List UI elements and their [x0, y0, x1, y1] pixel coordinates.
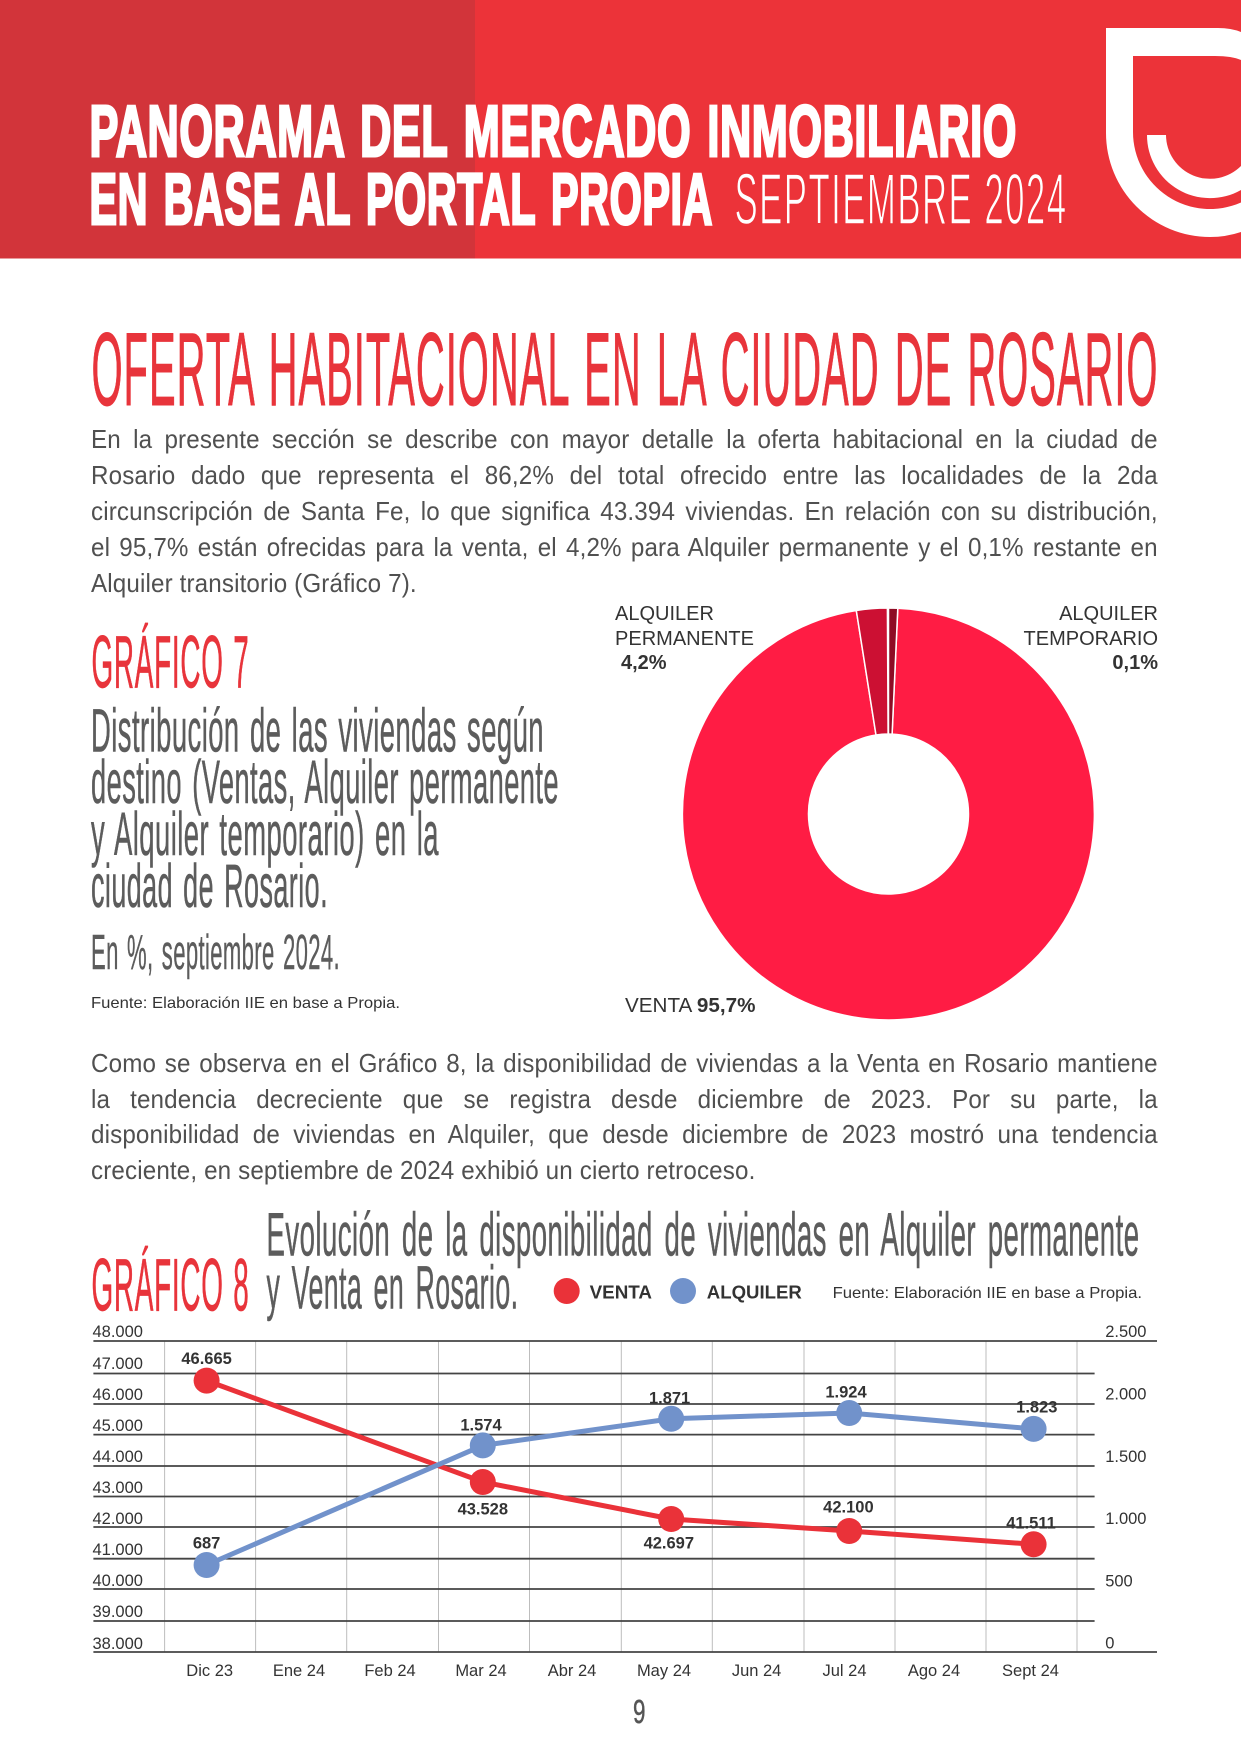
right axis: 2.500 — [1105, 1323, 1146, 1341]
data labels: 687 — [193, 1534, 220, 1552]
second paragraph: disponibilidad de viviendas en Alquiler, que desde diciembre de 2023 mostró una tendencia — [90, 1119, 1157, 1149]
icon: logo — [1106, 28, 1241, 237]
series: venta — [194, 1368, 1047, 1557]
second paragraph: Como se observa en el Gráfico 8, la disponibilidad de viviendas a la Venta en Rosario mantiene — [90, 1048, 1157, 1078]
graphic 8 description — [266, 1200, 1140, 1322]
left axis: 40.000 — [92, 1572, 143, 1590]
graphic 7 description — [91, 696, 559, 920]
x axis: Ago 24 — [908, 1662, 960, 1680]
x axis: Abr 24 — [548, 1662, 596, 1680]
legend: VENTA — [590, 1282, 652, 1302]
left axis — [92, 1323, 143, 1653]
label: alquiler permanente: ALQUILER — [615, 603, 714, 625]
intro paragraph: Rosario dado que representa el 86,2% del total ofrecido entre las localidades de la 2da — [90, 460, 1157, 490]
intro paragraph — [90, 424, 1158, 598]
header title: EN BASE AL PORTAL PROPIA — [90, 160, 713, 240]
label: alquiler permanente — [615, 603, 754, 674]
right axis: 0 — [1105, 1634, 1114, 1652]
donut labels — [615, 603, 1158, 1017]
second paragraph: la tendencia decreciente que se registra desde diciembre de 2023. Por su parte, la — [90, 1084, 1157, 1114]
right axis: 1.500 — [1105, 1448, 1146, 1466]
legend — [554, 1278, 802, 1304]
right axis: 1.000 — [1105, 1510, 1146, 1528]
header banner — [0, 0, 1241, 258]
graphic 7 title block — [91, 620, 559, 1012]
data labels: 1.574 — [460, 1416, 502, 1434]
data labels: 1.871 — [649, 1390, 690, 1408]
label: alquiler temporario — [1024, 603, 1158, 674]
page number: 9 — [633, 1693, 646, 1730]
graphic 8 title block — [92, 1200, 1140, 1326]
intro paragraph: En la presente sección se describe con mayor detalle la oferta habitacional en la ciudad de — [90, 424, 1157, 454]
right axis: 500 — [1105, 1572, 1133, 1590]
graphic 7 title block: GRÁFICO 7 — [92, 620, 250, 704]
slice: alquiler permanente — [856, 608, 888, 735]
x axis — [186, 1662, 1059, 1680]
label: alquiler permanente: PERMANENTE — [615, 628, 754, 650]
x axis: Jun 24 — [732, 1662, 781, 1680]
data labels — [181, 1350, 1057, 1552]
left axis: 45.000 — [92, 1417, 143, 1435]
left axis: 47.000 — [92, 1355, 143, 1373]
x axis: Dic 23 — [186, 1662, 233, 1680]
left axis: 38.000 — [92, 1635, 143, 1653]
legend: ALQUILER — [707, 1282, 802, 1302]
x axis: Ene 24 — [273, 1662, 325, 1680]
second paragraph: creciente, en septiembre de 2024 exhibió un cierto retroceso. — [90, 1154, 755, 1184]
label: alquiler temporario: ALQUILER — [1059, 603, 1158, 625]
x axis: Sept 24 — [1002, 1662, 1059, 1680]
data labels: 1.823 — [1016, 1398, 1057, 1416]
graphic 8 description: y Venta en Rosario. — [266, 1254, 518, 1322]
graphic 8 source: Fuente: Elaboración IIE en base a Propia. — [833, 1285, 1142, 1302]
line chart — [92, 1323, 1157, 1680]
data labels: 42.100 — [823, 1498, 874, 1516]
donut chart — [682, 608, 1094, 1020]
second paragraph — [90, 1048, 1158, 1184]
left axis: 42.000 — [92, 1510, 143, 1528]
text: Distribución de las viviendas según — [91, 696, 544, 764]
right axis — [1105, 1323, 1146, 1652]
x axis: Mar 24 — [455, 1662, 507, 1680]
graphic 7 description: y Alquiler temporario) en la — [91, 800, 439, 868]
label: alquiler temporario: TEMPORARIO — [1024, 628, 1158, 650]
x axis: May 24 — [637, 1662, 691, 1680]
left axis: 48.000 — [92, 1323, 143, 1341]
label: alquiler permanente: 4,2% — [621, 652, 667, 674]
data labels: 46.665 — [181, 1350, 232, 1368]
intro paragraph: circunscripción de Santa Fe, lo que significa 43.394 viviendas. En relación con su distribución, — [90, 496, 1157, 526]
series: alquiler — [194, 1400, 1047, 1578]
right axis: 2.000 — [1105, 1386, 1146, 1404]
left axis: 46.000 — [92, 1386, 143, 1404]
graphic 8 title block: GRÁFICO 8 — [92, 1244, 250, 1326]
data labels: 43.528 — [458, 1501, 508, 1519]
intro paragraph: Alquiler transitorio (Gráfico 7). — [90, 568, 416, 598]
data labels: 41.511 — [1006, 1514, 1056, 1532]
graphic 7 description: ciudad de Rosario. — [91, 852, 328, 920]
slice: alquiler temporario — [888, 608, 898, 734]
label: venta: VENTA 95,7% — [625, 995, 756, 1017]
left axis: 44.000 — [92, 1448, 143, 1466]
intro paragraph: el 95,7% están ofrecidas para la venta, el 4,2% para Alquiler permanente y el 0,1% restante en — [90, 532, 1157, 562]
left axis: 39.000 — [92, 1603, 143, 1621]
x axis: Jul 24 — [822, 1662, 867, 1680]
graphic 7 title block: En %, septiembre 2024. — [91, 926, 340, 980]
left axis: 41.000 — [92, 1541, 143, 1559]
text: destino (Ventas, Alquiler permanente — [91, 748, 559, 816]
x axis: Feb 24 — [364, 1662, 416, 1680]
left axis: 43.000 — [92, 1479, 143, 1497]
slice: venta — [682, 608, 1094, 1020]
data labels: 42.697 — [644, 1534, 694, 1552]
header title — [90, 92, 1068, 240]
data labels: 1.924 — [825, 1383, 867, 1401]
graphic 7 source: Fuente: Elaboración IIE en base a Propia. — [91, 995, 400, 1012]
label: alquiler temporario: 0,1% — [1112, 652, 1158, 674]
